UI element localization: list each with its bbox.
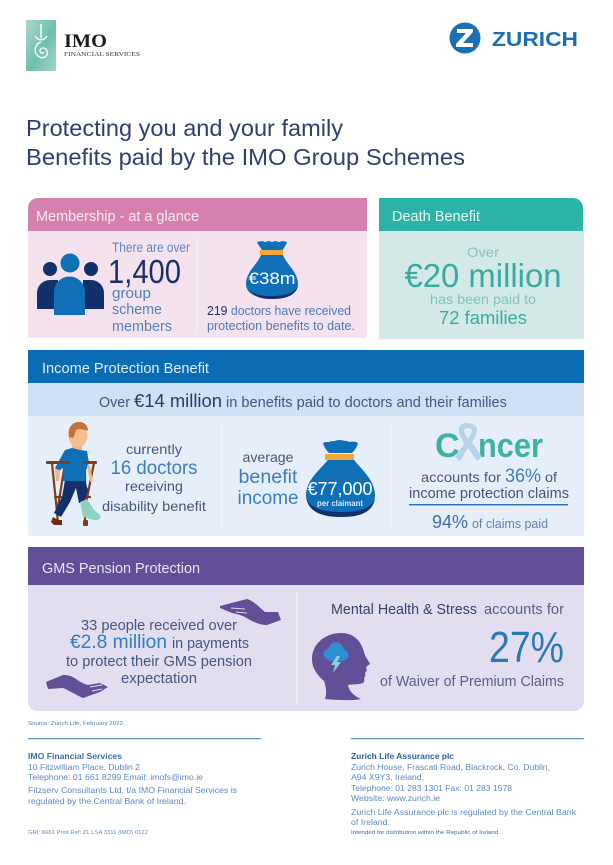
- text: average benefit income: benefit: [238, 467, 298, 488]
- stat: 20 million: Over: [467, 244, 499, 260]
- stat: 1,400 members: There are over: [112, 239, 190, 255]
- logo: IMO Financial Services: [26, 20, 140, 71]
- title: Protecting you and your family: [26, 115, 343, 141]
- logo: Zurich: [450, 22, 578, 54]
- footer: IMO contact: IMO Financial Services: [28, 752, 123, 761]
- footer: Zurich contact: Zurich House, Frascati Road, Blackrock, Co. Dublin,: [351, 763, 550, 772]
- stat: 20 million: [404, 244, 562, 328]
- panel: income protection: [28, 350, 584, 536]
- banner: 14 million: [28, 383, 584, 416]
- text: cancer claims: income protection claims: [409, 486, 569, 502]
- text: cancer claims: 36%: [505, 466, 541, 487]
- text: 16 doctors: 16 doctors: [110, 458, 198, 479]
- text: cancer claims: [409, 466, 569, 532]
- icon: bottom hand: [46, 675, 108, 698]
- text: 219 doctors: protection benefits to date.: [207, 318, 355, 333]
- footer: Zurich contact: Intended for distribution within the Republic of Ireland.: [351, 830, 501, 836]
- stat: 20 million: €20 million: [404, 257, 562, 294]
- footer: IMO contact: GRI: 6661 Print Ref: ZL LSA 3311 (IMO) 0122: [28, 830, 148, 836]
- icon: awareness ribbon: [455, 423, 482, 461]
- death benefit heading: Death Benefit: [392, 209, 480, 225]
- footer: Zurich contact: Telephone: 01 283 1301 Fax: 01 283 1578: [351, 784, 513, 793]
- text: cancer claims: of: [545, 469, 557, 485]
- text: mental health: 27%: [489, 623, 564, 672]
- membership heading: [28, 198, 367, 231]
- title: [26, 115, 465, 170]
- text: 2.8 million: in payments: [172, 636, 249, 652]
- text: 2.8 million: to protect their GMS pension: [66, 654, 252, 670]
- footer: IMO contact: regulated by the Central Bank of Ireland.: [28, 797, 186, 806]
- death benefit heading: [379, 198, 583, 231]
- GMS heading: GMS Pension Protection: [42, 561, 200, 577]
- text: average benefit income: [238, 449, 298, 509]
- stat: 1,400 members: members: [112, 319, 172, 335]
- text: 16 doctors: receiving: [125, 478, 183, 494]
- stat: 1,400 members: [108, 239, 190, 335]
- text: mental health: accounts for: [484, 602, 564, 618]
- title: Benefits paid by the IMO Group Schemes: [26, 144, 465, 170]
- logo: IMO Financial Services: IMO: [64, 31, 107, 52]
- icon: person on crutches: [46, 422, 100, 526]
- text: average benefit income: average: [242, 449, 294, 465]
- cancer wordmark with ribbon: ncer: [478, 427, 543, 465]
- membership heading: Membership - at a glance: [36, 209, 199, 225]
- text: 2.8 million: expectation: [121, 671, 197, 687]
- icon: top hand: [220, 599, 281, 625]
- stat: 1,400 members: scheme: [112, 302, 162, 318]
- text: 16 doctors: disability benefit: [102, 498, 206, 514]
- stat: 20 million: 72 families: [439, 308, 527, 328]
- logo: IMO Financial Services: FINANCIAL SERVICES: [64, 51, 140, 58]
- text: 2.8 million: 33 people received over: [81, 618, 237, 634]
- footer: Zurich contact: Zurich Life Assurance plc: [351, 752, 455, 761]
- text: 219 doctors: [207, 303, 355, 333]
- text: mental health: [331, 602, 564, 690]
- footer: IMO contact: 10 Fitzwilliam Place, Dublin 2: [28, 763, 141, 772]
- text: cancer claims: of claims paid: [472, 516, 548, 531]
- panel: membership: [28, 198, 367, 338]
- footer: IMO contact: Fitzserv Consultants Ltd. t/a IMO Financial Services is: [28, 786, 237, 795]
- footer: IMO contact: [28, 738, 261, 836]
- icon: money bag 77,000: €77,000: [308, 479, 372, 499]
- icon: money bag 38m: €38m: [248, 269, 296, 288]
- text: 2.8 million: [66, 618, 252, 687]
- cancer wordmark with ribbon: C: [435, 427, 460, 465]
- stat: 20 million: has been paid to: [430, 291, 536, 307]
- text: cancer claims: 94%: [432, 512, 468, 532]
- GMS heading: [28, 547, 584, 585]
- text: 16 doctors: currently: [126, 441, 182, 457]
- text: 2.8 million: €2.8 million: [70, 632, 167, 653]
- footer: Zurich contact: Zurich Life Assurance plc is regulated by the Central Bank: [351, 808, 577, 817]
- panel: GMS pension protection: [28, 547, 584, 711]
- stat: 1,400 members: 1,400: [108, 253, 181, 290]
- text: 219 doctors: 219 doctors have received: [207, 303, 351, 318]
- icon: money bag 77,000: per claimant: [317, 499, 363, 508]
- text: cancer claims: accounts for: [421, 469, 501, 485]
- logo: Zurich: ZURICH: [492, 29, 578, 51]
- income protection heading: Income Protection Benefit: [42, 361, 209, 377]
- banner: 14 million: €14 million: [134, 391, 222, 411]
- banner: 14 million: in benefits paid to doctors and their families: [226, 395, 507, 411]
- footer: Zurich contact: of Ireland.: [351, 818, 390, 827]
- text: average benefit income: income: [238, 488, 298, 509]
- text: mental health: of Waiver of Premium Claims: [380, 674, 564, 690]
- panel: death benefit: [379, 198, 584, 339]
- stat: 1,400 members: group: [112, 286, 151, 302]
- footer: Zurich contact: [351, 738, 584, 836]
- icon: people: [37, 254, 104, 315]
- icon: head with storm cloud: [312, 633, 370, 700]
- source note: Source: Zurich Life, February 2022: [28, 721, 123, 727]
- cancer wordmark with ribbon: [435, 423, 543, 465]
- footer: IMO contact: Telephone: 01 661 8299 Email: imofs@imo.ie: [28, 773, 204, 782]
- text: 16 doctors: [102, 441, 206, 514]
- income protection heading: [28, 350, 584, 383]
- text: mental health: Mental Health & Stress: [331, 602, 477, 618]
- banner: 14 million: Over: [99, 395, 130, 411]
- icon: money bag 38m: [246, 241, 298, 299]
- footer: Zurich contact: Website: www.zurich.ie: [351, 794, 441, 803]
- footer: Zurich contact: A94 X9Y3, Ireland.: [351, 773, 424, 782]
- icon: money bag 77,000: [306, 440, 375, 517]
